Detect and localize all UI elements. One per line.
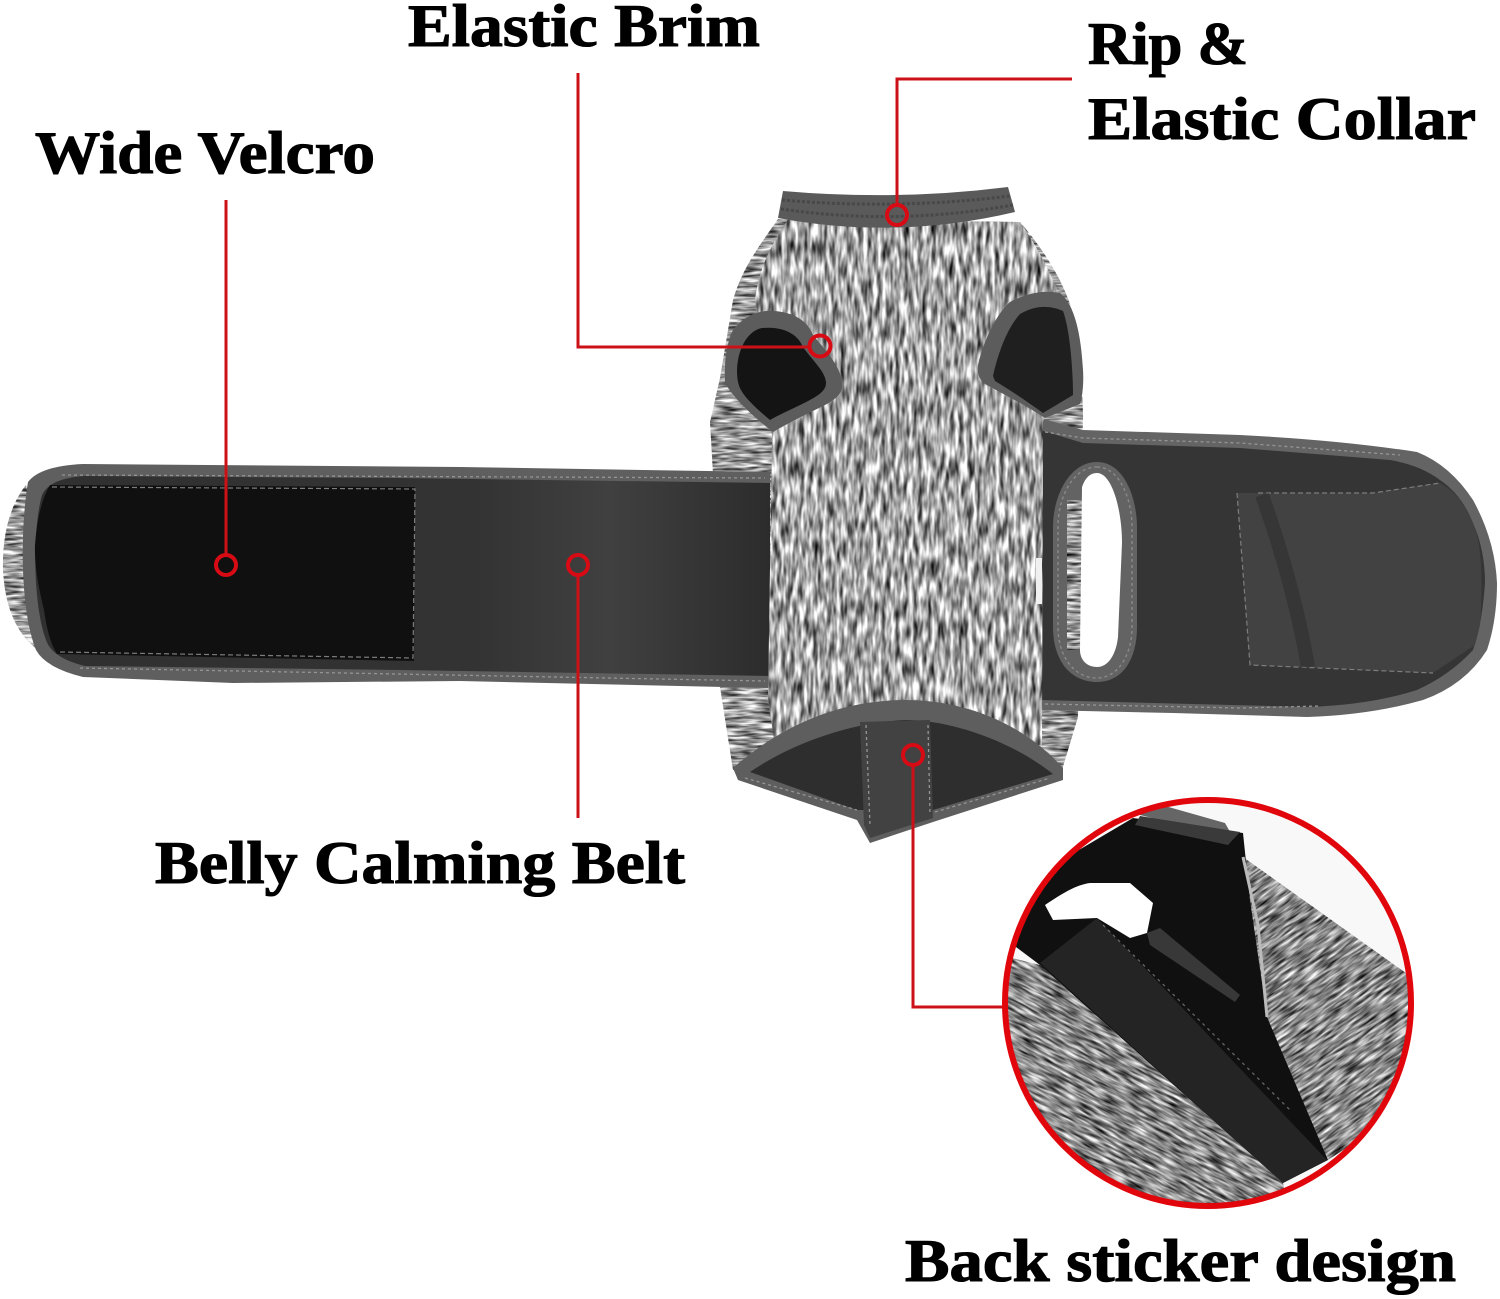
callout line: elastic brim [578, 73, 830, 356]
product: recovery suit [3, 187, 1497, 843]
heading: belly calming belt: Belly Calming Belt [155, 830, 685, 896]
heading: back sticker design: Back sticker design [905, 1228, 1456, 1294]
bottom hem [733, 700, 1063, 843]
back layer of suit [710, 219, 1083, 770]
tail flap [860, 720, 933, 838]
heading: rip and elastic collar: Elastic Collar [1088, 86, 1476, 152]
left belly belt [3, 464, 770, 688]
callout line: belly calming belt [568, 555, 588, 818]
size tag [1036, 558, 1042, 604]
collar [778, 187, 1015, 228]
front fabric panel [755, 219, 1072, 745]
callout line: wide velcro [216, 200, 236, 575]
belt opening [1053, 462, 1137, 682]
callout line: rip and elastic collar [887, 79, 1072, 225]
velcro patch [35, 485, 415, 661]
heading: wide velcro: Wide Velcro [35, 120, 375, 186]
pocket [1237, 483, 1481, 673]
heading: rip and elastic collar [1088, 11, 1476, 152]
callout line: back sticker design [903, 745, 1005, 1007]
left armhole [725, 311, 842, 432]
inset circle: back sticker detail [1002, 797, 1414, 1209]
right belt with hole and pocket [1040, 418, 1497, 717]
heading: rip and elastic collar: Rip & [1088, 11, 1248, 77]
right armhole [978, 292, 1083, 418]
